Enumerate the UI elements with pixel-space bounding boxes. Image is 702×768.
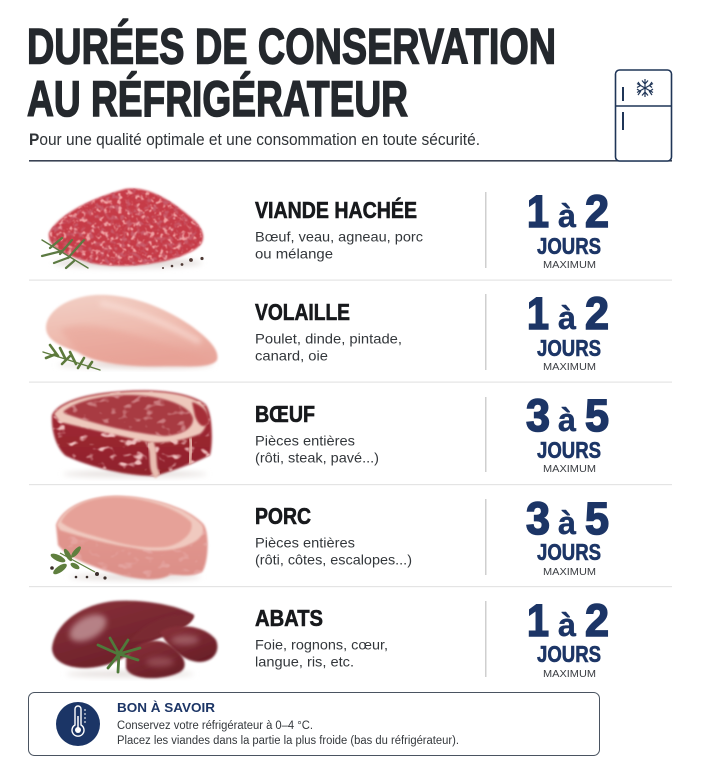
heading: volaille: VOLAILLE bbox=[255, 299, 350, 325]
duration: 1 à 2 jours: JOURS bbox=[537, 641, 601, 667]
duration: 1 à 2 jours: à bbox=[558, 607, 576, 643]
duration: 3 à 5 jours bbox=[485, 493, 609, 578]
callout heading: BON À SAVOIR bbox=[117, 700, 216, 715]
description: abats bbox=[255, 636, 388, 670]
title bbox=[27, 18, 556, 127]
image: offal bbox=[52, 601, 217, 678]
description: abats: Foie, rognons, cœur, bbox=[255, 636, 388, 652]
callout: bon à savoir bbox=[28, 692, 600, 756]
duration: 1 à 2 jours: JOURS bbox=[537, 335, 601, 361]
image: pork chop bbox=[49, 496, 208, 580]
row: abats bbox=[52, 595, 609, 680]
duration: 3 à 5 jours: 3 bbox=[526, 493, 550, 544]
row separators bbox=[29, 280, 672, 587]
description: porc bbox=[255, 534, 412, 568]
description: volaille bbox=[255, 330, 402, 364]
subtitle: Pour une qualité optimale et une consommation en toute sécurité. bbox=[29, 131, 480, 149]
callout text bbox=[117, 720, 459, 747]
duration: 3 à 5 jours: à bbox=[558, 402, 576, 438]
duration: 1 à 2 jours: à bbox=[558, 198, 576, 234]
duration: 1 à 2 jours bbox=[485, 186, 609, 271]
description: boeuf bbox=[255, 432, 379, 466]
image: ground beef bbox=[42, 188, 204, 269]
row: boeuf bbox=[52, 390, 609, 477]
header rule bbox=[29, 160, 672, 162]
description: viande hachée: ou mélange bbox=[255, 246, 333, 262]
duration: 3 à 5 jours: 5 bbox=[585, 390, 609, 441]
duration: 1 à 2 jours: à bbox=[558, 300, 576, 336]
callout text: Conservez votre réfrigérateur à 0–4 °C. bbox=[117, 720, 313, 732]
heading: boeuf: BŒUF bbox=[255, 401, 315, 427]
duration: 3 à 5 jours: 5 bbox=[585, 493, 609, 544]
duration: 1 à 2 jours: 1 bbox=[527, 288, 549, 339]
duration: 1 à 2 jours: MAXIMUM bbox=[543, 668, 596, 680]
duration: 1 à 2 jours: JOURS bbox=[537, 233, 601, 259]
duration: 1 à 2 jours bbox=[485, 595, 609, 680]
icon: thermometer bbox=[56, 702, 100, 746]
description: boeuf: Pièces entières bbox=[255, 432, 355, 448]
duration: 1 à 2 jours: 2 bbox=[585, 595, 609, 646]
duration: 3 à 5 jours: 3 bbox=[526, 390, 550, 441]
heading: viande hachée: VIANDE HACHÉE bbox=[255, 196, 417, 223]
callout text: Placez les viandes dans la partie la plus froide (bas du réfrigérateur). bbox=[117, 735, 459, 747]
heading: abats: ABATS bbox=[255, 605, 323, 631]
duration: 1 à 2 jours bbox=[485, 288, 609, 373]
duration: 1 à 2 jours: MAXIMUM bbox=[543, 259, 596, 271]
duration: 3 à 5 jours: MAXIMUM bbox=[543, 463, 596, 475]
description: viande hachée bbox=[255, 228, 423, 262]
duration: 3 à 5 jours: MAXIMUM bbox=[543, 566, 596, 578]
heading: porc: PORC bbox=[255, 503, 311, 529]
duration: 3 à 5 jours: JOURS bbox=[537, 539, 601, 565]
description: boeuf: (rôti, steak, pavé...) bbox=[255, 450, 379, 466]
duration: 1 à 2 jours: 1 bbox=[527, 186, 549, 237]
image: beef steak bbox=[52, 390, 212, 477]
duration: 1 à 2 jours: 2 bbox=[585, 288, 609, 339]
description: porc: (rôti, côtes, escalopes...) bbox=[255, 552, 412, 568]
duration: 1 à 2 jours: 1 bbox=[527, 595, 549, 646]
title: AU RÉFRIGÉRATEUR bbox=[27, 71, 408, 127]
description: volaille: Poulet, dinde, pintade, bbox=[255, 330, 402, 346]
description: porc: Pièces entières bbox=[255, 534, 355, 550]
duration: 3 à 5 jours bbox=[485, 390, 609, 475]
row: viande hachée bbox=[42, 186, 609, 271]
duration: 1 à 2 jours: 2 bbox=[585, 186, 609, 237]
duration: 3 à 5 jours: JOURS bbox=[537, 437, 601, 463]
description: abats: langue, ris, etc. bbox=[255, 654, 354, 670]
row: volaille bbox=[43, 288, 609, 373]
icon: fridge bbox=[616, 70, 672, 161]
description: volaille: canard, oie bbox=[255, 348, 328, 364]
row: porc bbox=[49, 493, 609, 580]
duration: 1 à 2 jours: MAXIMUM bbox=[543, 361, 596, 373]
duration: 3 à 5 jours: à bbox=[558, 505, 576, 541]
description: viande hachée: Bœuf, veau, agneau, porc bbox=[255, 228, 423, 244]
image: chicken breast bbox=[43, 295, 217, 370]
